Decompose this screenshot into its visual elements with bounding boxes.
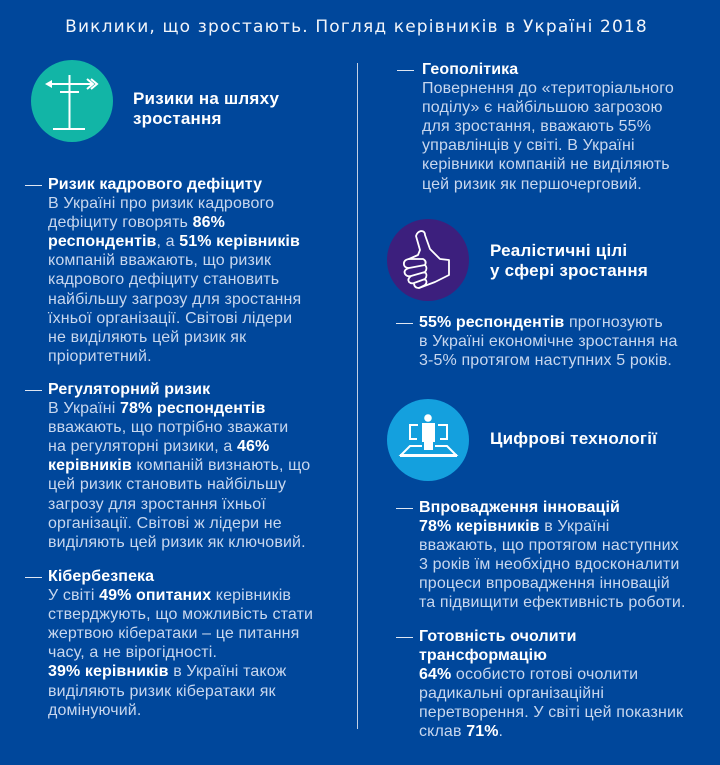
text: talent risk: не виділяють цей ризик як [48, 329, 246, 346]
text: talent risk: В Україні про ризик кадрового [48, 195, 274, 212]
dash [25, 577, 42, 578]
text: transformation readiness: перетворення. У світі цей показник [419, 704, 683, 721]
text: innovation: процеси впровадження інновацій [419, 575, 670, 592]
text: talent risk: дефіциту говорять 86% [48, 214, 225, 231]
title: Виклики, що зростають. Погляд керівників в Україні 2018 [65, 17, 648, 37]
text: geopolitics: Геополітика [422, 61, 518, 78]
text: transformation readiness: 64% особисто готові очолити [419, 666, 638, 683]
text: cybersecurity: стверджують, що можливість стати [48, 606, 313, 623]
dash [396, 637, 413, 638]
text: geopolitics: цей ризик як першочерговий. [422, 176, 642, 193]
text: innovation: та підвищити ефективність роботи. [419, 594, 686, 611]
text: innovation: 3 років їм необхідно вдосконалити [419, 556, 679, 573]
text: regulatory risk: організації. Світові ж лідери не [48, 515, 282, 532]
text: regulatory risk: загрозу для зростання їхньої [48, 496, 266, 513]
text: geopolitics: керівники компаній не виділяють [422, 156, 670, 173]
text: innovation: Впровадження інновацій [419, 499, 620, 516]
text: regulatory risk: керівників компаній визнають, що [48, 457, 310, 474]
text: transformation readiness: трансформацію [419, 647, 547, 664]
text: regulatory risk: виділяють цей ризик як ключовий. [48, 534, 306, 551]
text: cybersecurity: жертвою кібератаки – це питання [48, 625, 299, 642]
text: geopolitics: Повернення до «територіального [422, 80, 674, 97]
text: cybersecurity: У світі 49% опитаних керівників [48, 587, 291, 604]
column divider [356, 63, 358, 729]
text: cybersecurity: Кібербезпека [48, 568, 154, 585]
text: talent risk: Ризик кадрового дефіциту [48, 176, 262, 193]
heading: realistic goals: у сфері зростання [490, 260, 648, 280]
text: regulatory risk: на регуляторні ризики, а 46% [48, 438, 269, 455]
text: innovation [419, 499, 686, 611]
text: geopolitics: управлінців у світі. В Україні [422, 137, 635, 154]
text: regulatory risk: цей ризик становить найбільшу [48, 476, 286, 493]
text: transformation readiness: склав 71%. [419, 723, 503, 740]
text: cybersecurity: виділяють ризик кібератаки як [48, 683, 276, 700]
text: innovation: вважають, що протягом наступних [419, 537, 679, 554]
text: talent risk [48, 176, 301, 365]
text: cybersecurity: часу, а не вірогідності. [48, 644, 217, 661]
text: transformation readiness [419, 628, 683, 740]
text: regulatory risk: вважають, що потрібно зважати [48, 419, 288, 436]
heading: growth risks [133, 89, 279, 128]
dash [397, 70, 414, 71]
text: talent risk: їхньої організації. Світові лідери [48, 310, 292, 327]
heading: realistic goals [490, 241, 648, 280]
text: geopolitics [422, 61, 674, 193]
text: transformation readiness: Готовність очолити [419, 628, 577, 645]
icon: pole with arrows [31, 60, 113, 142]
text: transformation readiness: радикальні організаційні [419, 685, 604, 702]
text: talent risk: респондентів, а 51% керівників [48, 233, 300, 250]
text: geopolitics: для зростання, вважають 55% [422, 118, 651, 135]
text: forecast [419, 314, 678, 369]
text: cybersecurity: домінуючий. [48, 702, 141, 719]
text: innovation: 78% керівників в Україні [419, 518, 610, 535]
text: forecast: 3-5% протягом наступних 5 років. [419, 352, 672, 369]
dash [25, 185, 42, 186]
dash [25, 390, 42, 391]
text: talent risk: компаній вважають, що ризик [48, 252, 271, 269]
text: cybersecurity [48, 568, 313, 719]
text: geopolitics: поділу» є найбільшою загрозою [422, 99, 663, 116]
heading: digital technologies: Цифрові технології [490, 429, 657, 448]
text: talent risk: кадрового дефіциту становить [48, 271, 279, 288]
heading: growth risks: Ризики на шляху [133, 89, 279, 108]
text: regulatory risk: В Україні 78% респондентів [48, 400, 265, 417]
icon: person on laptop [387, 399, 469, 481]
dash [396, 323, 413, 324]
text: cybersecurity: 39% керівників в Україні також [48, 663, 286, 680]
icon: thumbs up [387, 219, 469, 301]
dash [396, 508, 413, 509]
text: forecast: в Україні економічне зростання на [419, 333, 678, 350]
text: forecast: 55% респондентів прогнозують [419, 314, 663, 331]
heading: realistic goals: Реалістичні цілі [490, 241, 627, 260]
text: talent risk: пріоритетний. [48, 348, 152, 365]
text: talent risk: найбільшу загрозу для зростання [48, 291, 301, 308]
text: regulatory risk [48, 381, 310, 551]
heading: growth risks: зростання [133, 108, 222, 128]
text: regulatory risk: Регуляторний ризик [48, 381, 210, 398]
